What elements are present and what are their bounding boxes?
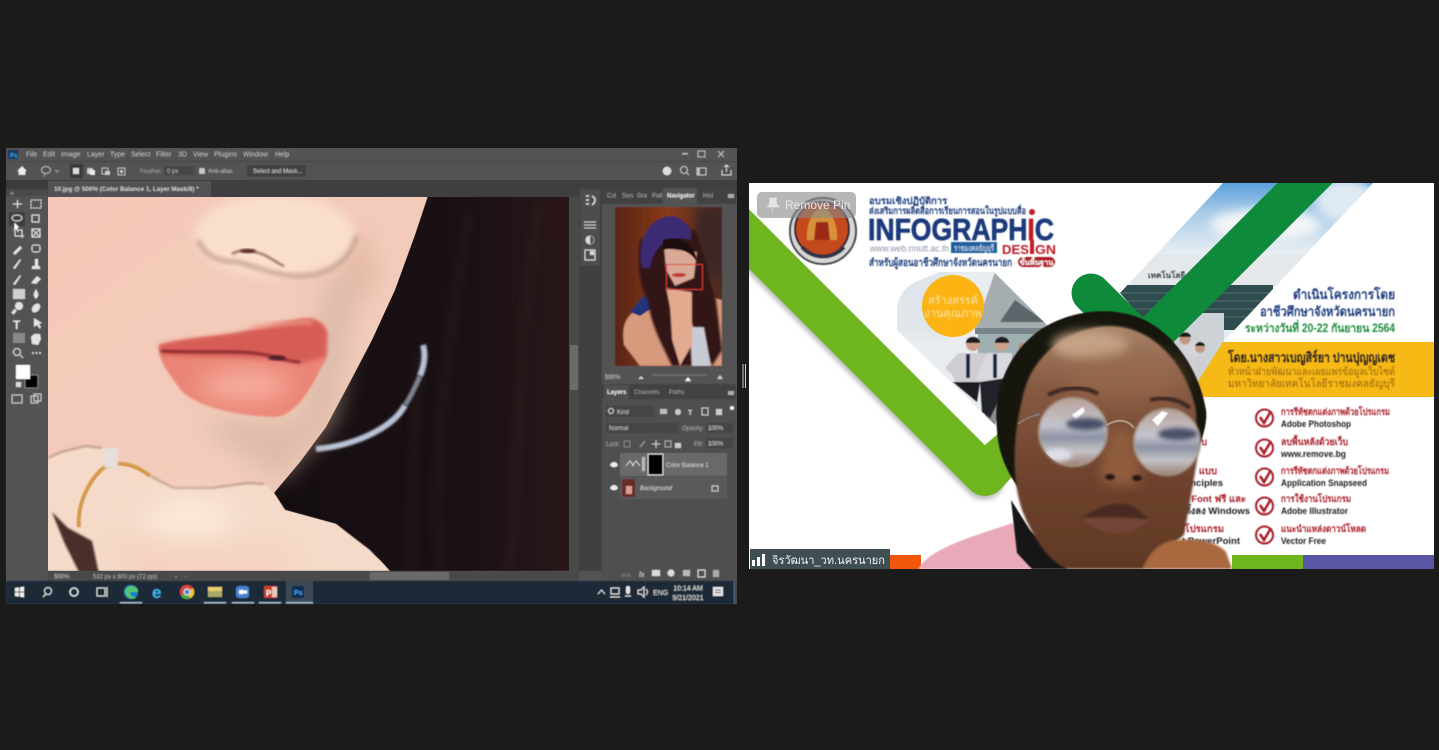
panel: layers: Normal [609,426,628,432]
topic: Adobe Photoshop [1256,406,1390,430]
topic: Adobe Photoshop: Adobe Photoshop [1281,419,1351,430]
dock icons [579,189,603,571]
necklace highlight [316,345,424,449]
panel: navigator: Hist [703,194,714,200]
panel: layers: Paths [669,390,684,396]
panel: layers: Opacity: [682,426,704,432]
Windows taskbar: 10:14 AM [673,586,703,592]
canvas: zoomed portrait of lips and nose [48,190,580,580]
layer action icons: fx [639,572,645,579]
title block: อบรมเชิงปฏิบัติการ [869,195,948,207]
Windows taskbar: Ps [294,590,303,597]
foreground and background colours [16,365,38,388]
yellow circle badge: สร้างสรรค์ [928,294,978,307]
organiser text: หัวหน้าฝ่ายพัฒนาและเผยแพร่ข้อมูลเว็บไซต์ [1228,364,1395,378]
organiser text: ระหว่างวันที่ 20-22 กันยายน 2564 [1245,319,1396,335]
panel: navigator [602,188,736,384]
layer filter row [606,406,654,417]
hand on chin [1143,540,1232,569]
topic: Vector Free: Vector Free [1281,536,1326,547]
purple hat [641,216,691,268]
organiser text [1227,286,1396,390]
remove pin button: Remove Pin [785,198,850,212]
forehead highlight [1052,331,1128,359]
topic: Adobe Illustrator: การใช้งานโปรแกรม [1281,493,1351,505]
panel: navigator: Col [607,194,616,200]
options bar: 0 px [167,169,178,175]
menu bar: File [26,152,37,158]
zoom slider: 500% [605,375,621,381]
icon: Chrome [180,585,194,599]
organiser text: มหาวิทยาลัยเทคโนโลยีราชมงคลธัญบุรี [1228,377,1395,390]
photo: sky and building strip [1120,183,1373,382]
light green diagonal band [730,220,1018,490]
options bar: Feather: [140,169,163,175]
icon: file explorer [208,587,222,597]
topic list left column fragments: t PowerPoint [1182,536,1241,547]
layer: Background [610,477,727,499]
tools panel [6,189,48,571]
heading: INFOGRAPHIC: INFOGRAPHIC [868,212,1054,247]
two people at right [1178,332,1206,370]
nose [195,194,374,300]
system tray [598,590,605,594]
topic list left column fragments [1182,438,1250,545]
layer: Color Balance 1: Color Balance 1 [666,463,709,469]
title block: ขั้นพื้นฐาน [1020,256,1054,268]
topic: Vector Free [1256,523,1366,547]
panel: presenter video with slide behind [749,183,1434,569]
navigator thumbnail photo [615,207,722,366]
lock row: Lock: [606,442,621,448]
face [664,248,697,286]
colour footer strip [889,555,1434,569]
photo: sky and building strip: เทคโนโลยี [1148,270,1185,280]
organiser text: อาชีวศึกษาจังหวัดนครนายก [1260,304,1395,319]
black scarf [1011,500,1068,569]
eyebrows [1048,388,1098,395]
menu bar: Ps [10,154,18,160]
organiser text: โดย.นางสาวเบญสิร์ยา ปานปุญญเดช [1227,348,1395,366]
Windows taskbar: ENG [653,590,668,597]
blue top [630,294,652,316]
title block: สำหรับผู้สอนอาชีวศึกษาจังหวัดนครนายก [869,256,1012,270]
dark gap between fingers [52,512,99,574]
panel: layers: 100% [708,426,724,432]
panel: layers: Kind [617,410,629,416]
college logo seal [790,198,856,264]
layer action icons [621,570,719,579]
icon: Internet Explorer: e [152,583,161,602]
title block: ราชมงคลธัญบุรี [954,243,994,254]
document tab title: 10.jpg @ 500% (Color Balance 1, Layer Mask/8) * [54,186,199,193]
gold ring [79,464,150,527]
status bar: › [175,574,177,580]
photo: staff in front of building [897,272,1048,425]
title block: www.web.rmutt.ac.th [869,244,949,254]
status bar: 500% [54,574,70,580]
topic: remove background: www.remove.bg [1280,449,1346,460]
hand under chin [48,446,398,580]
icon: search [44,588,52,594]
yellow circle badge: งานคุณภาพ [924,308,982,320]
topic list left column fragments: บ [1201,437,1207,448]
menu bar: Type [110,152,125,158]
topic: Adobe Illustrator: Adobe Illustrator [1281,506,1348,517]
menu bar: View [193,152,209,158]
panel: navigator: Navigator [667,194,695,200]
icon: Zoom [236,586,249,598]
topic: Snapseed [1256,465,1389,489]
menu bar: Layer [87,152,105,158]
title block: ส่งเสริมการผลิตสื่อการเรียนการสอนในรูปแบบสื่อ [869,203,1026,218]
topic list right column [1256,406,1390,547]
topic list left column fragments: มโปรแกรม [1178,523,1224,535]
split view handle [743,364,746,388]
topic list left column fragments: แบบ [1199,466,1217,477]
participant name label: จิรวัฒนา_วท.นครนายก [772,554,885,567]
document tab row [6,180,737,197]
panel: layers: Fill: [694,442,704,448]
topic: Snapseed: การรีทัชตกแต่งภาพด้วยโปรแกรม [1281,465,1389,477]
topic: remove background: ลบพื้นหลังด้วยเว็บ [1281,434,1348,448]
topic: remove background [1256,434,1348,460]
nose [1100,430,1142,486]
icon: Photoshop [292,586,304,598]
panel: layers: T [688,410,693,417]
title block [868,195,1056,270]
menu bar: Help [275,152,290,158]
shoulder and arm [623,295,722,366]
topic list left column fragments: nciples [1190,478,1223,489]
icon: PowerPoint [264,586,277,598]
hair [639,230,722,366]
panel: layers [602,384,736,581]
menu bar: Select [131,152,151,158]
icon: start [15,587,24,597]
hair area [274,190,580,580]
options bar: Anti-alias [208,169,233,175]
participant name label [750,549,890,569]
menu bar [8,150,724,160]
canvas vertical scrollbar [569,197,579,571]
menu bar: Plugins [214,152,237,158]
options bar: Select and Mask... [253,169,303,175]
status bar: ‹ [185,574,187,580]
panel: navigator: Sws [622,194,633,200]
hand [666,288,692,366]
topic list left column fragments: ก Font ฟรี และ [1183,493,1246,505]
panel: layers: Channels [634,390,659,396]
blend mode and opacity row [606,423,678,433]
status bar: 532 px x 800 px (72 ppi) [93,574,157,580]
dark green check mark [1072,183,1332,342]
shadow under the lip and chin [200,275,360,480]
tools panel: ‹‹ [10,191,14,197]
menu bar: 3D [178,152,187,158]
face [1014,326,1197,569]
layer: Background: Background [640,486,673,492]
menu bar: Edit [43,152,55,158]
pink shirt [918,523,1034,569]
mouse cursor [14,222,20,233]
Windows taskbar: P [266,589,272,598]
menu bar: Image [61,152,81,158]
panel: layers: 100% [708,442,724,448]
lips [159,319,327,417]
lips [1082,504,1149,533]
presenter [918,311,1232,569]
glasses [1018,398,1200,475]
layer action icons: ⊖⊖ [621,573,631,579]
title block: GN [1035,242,1056,257]
navigator view rectangle [666,264,702,290]
tools panel: T [13,318,21,332]
topic: Vector Free: แนะนำแหล่งดาวน์โหลด [1281,523,1366,535]
Windows taskbar: 9/21/2021 [672,595,704,602]
layer: Color Balance 1 [610,453,727,476]
panel: Photoshop shared screen window [6,148,737,604]
organiser text: ดำเนินโครงการโดย [1293,286,1395,302]
yellow circle badge [922,275,984,337]
hair [996,311,1206,490]
panel: navigator: Gra [637,194,648,200]
icon: Edge [124,585,138,599]
topic: Adobe Photoshop: การรีทัชตกแต่งภาพด้วยโปรแกรม [1281,406,1390,418]
Windows taskbar [6,581,736,604]
yellow speaker band [1192,342,1434,397]
topic: Snapseed: Application Snapseed [1281,478,1367,489]
menu bar: Window [243,152,269,158]
panel: layers: Layers [607,390,627,396]
topic list left column fragments: ติดตั้งลง Windows [1172,503,1250,517]
panel: navigator: Patl [652,194,662,200]
menu bar: Filter [156,152,172,158]
title block: DES [1002,242,1029,257]
status bar [48,571,579,581]
topic: Adobe Illustrator [1256,493,1351,517]
options bar [6,161,737,178]
remove pin button [757,192,856,218]
people group [945,337,1032,418]
